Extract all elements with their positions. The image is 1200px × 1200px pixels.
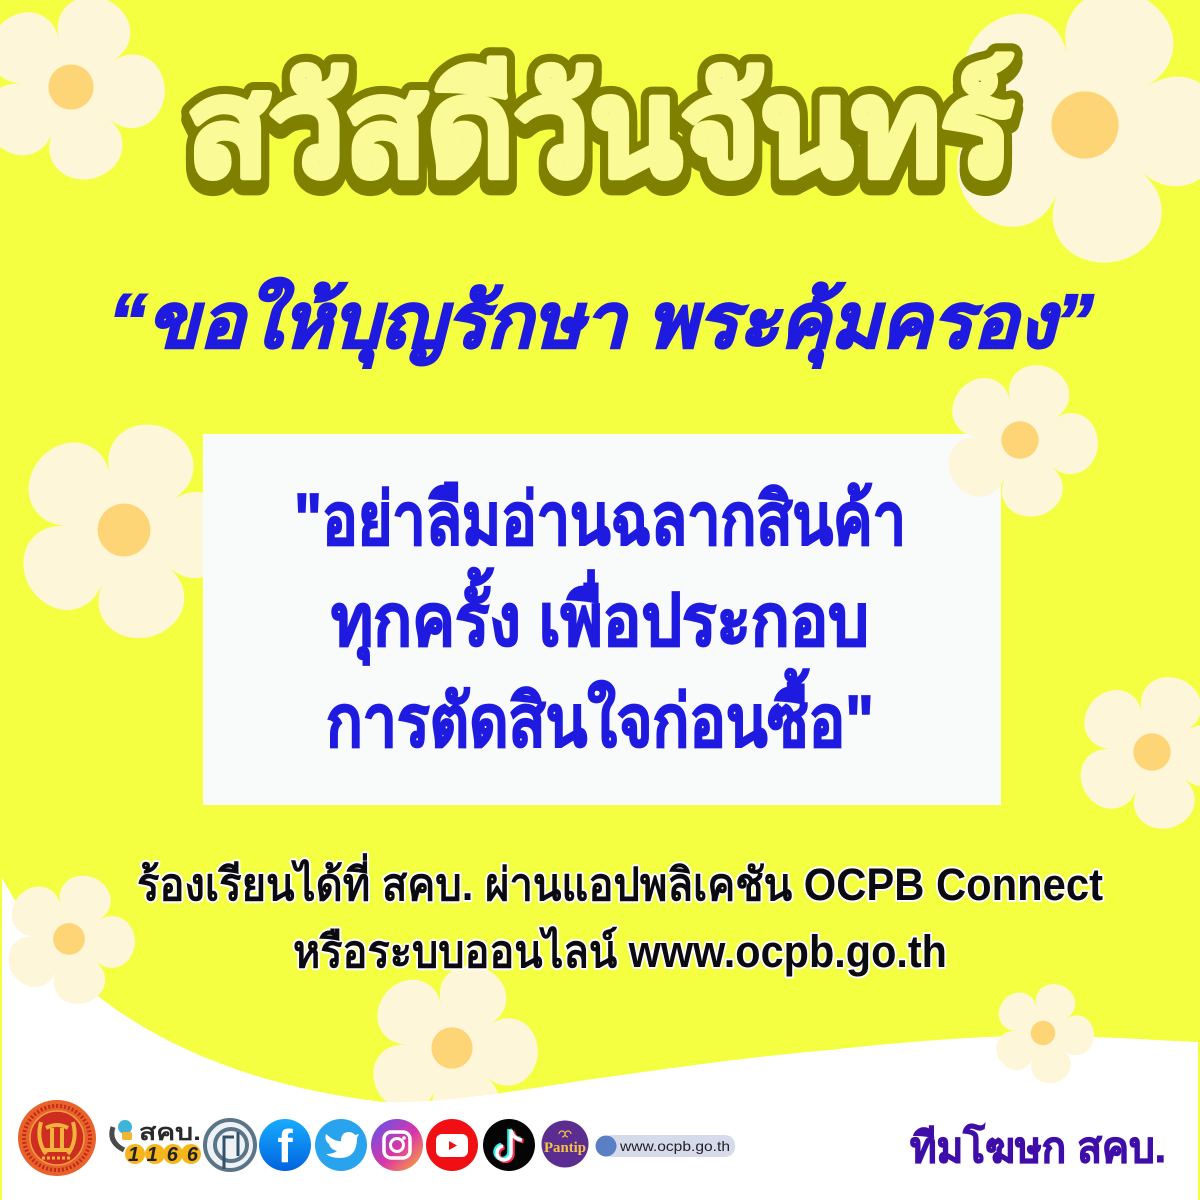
icon: pantip	[542, 1120, 588, 1168]
icon: pantip: Pantip	[544, 1140, 586, 1156]
icon: tiktok	[483, 1119, 535, 1171]
contact text: ร้องเรียนได้ที่ สคบ. ผ่านแอปพลิเคชัน OCPB Connect	[137, 853, 1103, 910]
icon: hotline 1166: 1166	[128, 1144, 199, 1166]
icon: facebook	[259, 1119, 311, 1172]
icon: OCPB logo	[205, 1120, 255, 1170]
subtitle: “ขอให้บุญรักษา พระคุ้มครอง”	[108, 277, 1094, 368]
icon: hotline 1166: สคบ.	[139, 1119, 201, 1145]
icon: facebook: f	[277, 1120, 293, 1172]
message line 1: "อย่าลืมอ่านฉลากสินค้า	[294, 480, 906, 560]
flower: top right	[937, 0, 1200, 274]
white wave	[2, 878, 1198, 1200]
flower: top left	[0, 0, 167, 187]
team credit: ทีมโฆษก สคบ.	[910, 1123, 1166, 1171]
flower: middle right	[938, 356, 1100, 523]
title: สวัสดีวันจันทร์	[187, 54, 1013, 204]
contact text: หรือระบบออนไลน์ www.ocpb.go.th	[293, 925, 947, 977]
website badge: www.ocpb.go.th	[619, 1138, 730, 1154]
flower: bottom right	[989, 978, 1095, 1087]
message line 3: การตัดสินใจก่อนซื้อ"	[326, 668, 874, 762]
icon: youtube	[426, 1119, 478, 1171]
title: สวัสดีวันจันทร์	[187, 54, 1013, 204]
title: สวัสดีวันจันทร์	[187, 61, 1013, 211]
flower: bottom centre	[361, 956, 540, 1140]
contact text	[137, 853, 1103, 977]
flower: lower right	[1070, 668, 1200, 835]
website badge	[596, 1135, 735, 1157]
icon: instagram	[371, 1119, 423, 1171]
icon: hotline 1166	[112, 1119, 201, 1166]
flower: middle left	[8, 412, 237, 647]
flower: lower left	[0, 868, 137, 1009]
icon: OCPB seal	[18, 1100, 96, 1176]
message line 2: ทุกครั้ง เพื่อประกอบ	[331, 567, 869, 666]
icon: twitter	[315, 1119, 367, 1171]
message panel	[203, 434, 1001, 805]
